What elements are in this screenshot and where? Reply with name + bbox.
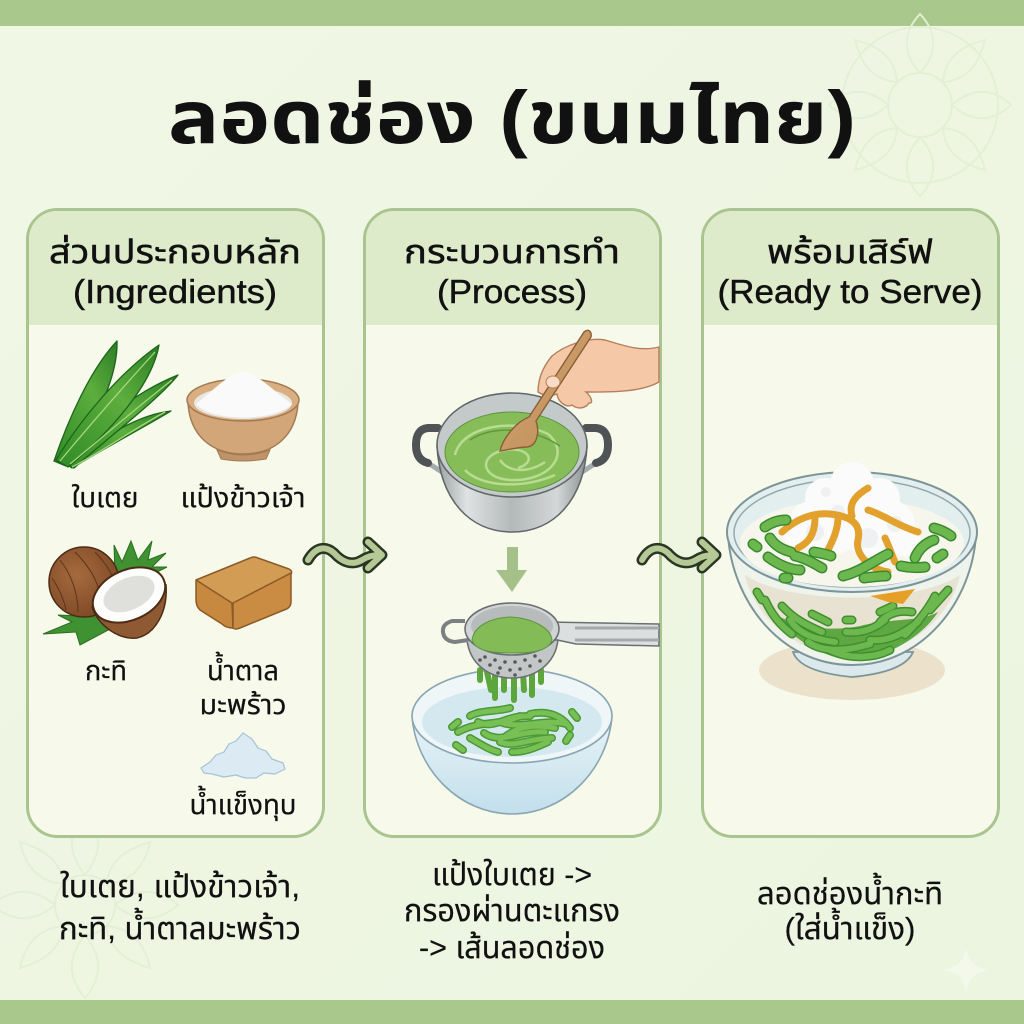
icon: bowl of rice flour [187, 372, 299, 461]
heading: process: กระบวนการทำ [404, 233, 620, 270]
caption: ingredients: กะทิ, น้ำตาลมะพร้าว [59, 907, 301, 946]
icon: strainer with noodles [443, 603, 659, 700]
icon: pot of green batter stirred by hand [416, 330, 659, 532]
spoon [500, 330, 591, 451]
panel header: process [366, 211, 659, 325]
icon: crushed ice [201, 733, 285, 778]
label: crushed ice: น้ำแข็งทุบ [190, 785, 296, 821]
icon: bowl of lod chong [727, 462, 977, 700]
watermark: thai floral bottom left [0, 812, 178, 998]
arrow: down to strainer [496, 547, 527, 592]
caption: process: แป้งใบเตย -> [432, 857, 592, 892]
label: pandan: ใบเตย [72, 482, 138, 513]
arrow: process to ready [642, 542, 716, 568]
heading: ingredients: ส่วนประกอบหลัก [49, 233, 301, 270]
bottom band [0, 1000, 1024, 1024]
icon: sparkle watermark [944, 948, 988, 992]
label: coconut milk: กะทิ [85, 655, 127, 686]
caption: process: กรองผ่านตะแกรง [404, 893, 620, 928]
heading: process [404, 233, 620, 310]
panel header: ready to serve [704, 211, 997, 325]
top band [0, 0, 1024, 26]
caption: ready to serve: (ใส่น้ำแข็ง) [784, 907, 916, 946]
arrow: ingredients to process [308, 542, 382, 568]
caption: ready to serve [757, 872, 943, 946]
hand [538, 339, 659, 408]
icon: coconut [43, 541, 174, 645]
caption: ready to serve: ลอดช่องน้ำกะทิ [757, 872, 943, 911]
caption: ingredients: ใบเตย, แป้งข้าวเจ้า, [60, 869, 300, 904]
panel: ingredients [28, 210, 324, 836]
label: palm sugar [200, 651, 286, 720]
caption: ingredients [59, 869, 301, 946]
label: palm sugar: มะพร้าว [200, 689, 286, 720]
panel: ready to serve [702, 210, 998, 836]
panel: process [364, 210, 660, 836]
watermark: thai floral top right [829, 14, 1011, 196]
heading: ingredients: (Ingredients) [73, 273, 277, 310]
icon: pandan leaves [54, 341, 178, 468]
caption: process [404, 857, 620, 965]
heading: ready to serve: พร้อมเสิร์ฟ [767, 233, 933, 270]
label: rice flour: แป้งข้าวเจ้า [180, 482, 306, 513]
heading: process: (Process) [437, 273, 587, 310]
heading: ready to serve: (Ready to Serve) [718, 273, 982, 310]
icon: glass bowl with noodles in water [412, 669, 612, 814]
panel header: ingredients [29, 211, 322, 325]
title: ลอดช่อง (ขนมไทย) [168, 76, 856, 159]
heading: ready to serve [718, 233, 982, 310]
icon: palm sugar block [196, 557, 292, 629]
heading: ingredients [49, 233, 301, 310]
label: palm sugar: น้ำตาล [207, 651, 279, 686]
caption: process: -> เส้นลอดช่อง [419, 930, 605, 965]
